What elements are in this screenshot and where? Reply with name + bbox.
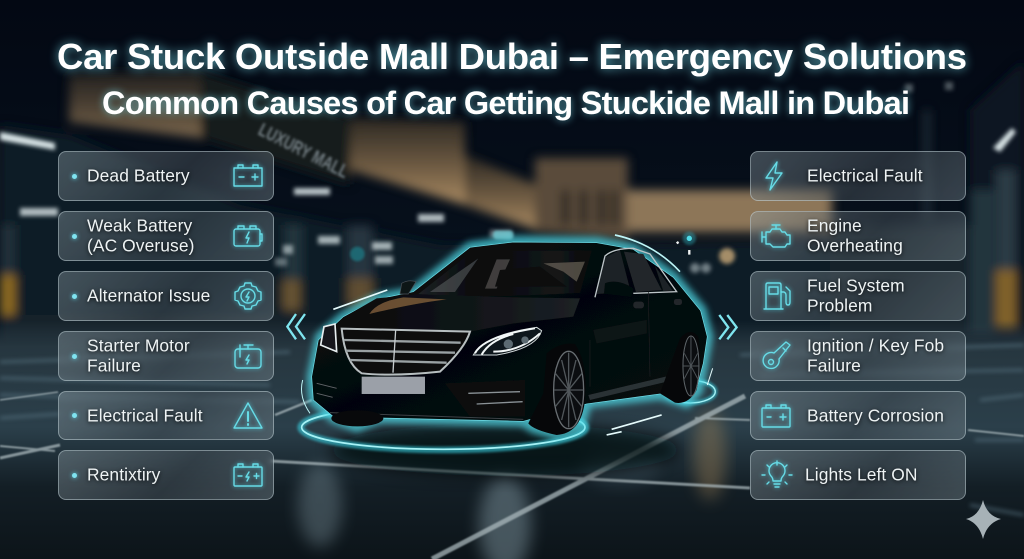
card: fuel system problem: Fuel System — [807, 276, 905, 296]
right chevrons — [719, 315, 737, 339]
garage and mall — [0, 60, 1024, 345]
card: weak battery: (AC Overuse) — [87, 235, 194, 255]
mirrors — [604, 282, 634, 297]
card: electrical fault: Electrical Fault — [87, 405, 203, 425]
card: dead battery — [58, 151, 274, 201]
card: starter motor failure: Failure — [87, 355, 141, 375]
car aura — [312, 241, 708, 435]
card: starter motor failure — [58, 331, 274, 381]
windshield — [418, 251, 592, 296]
card: ignition / key fob failure: Failure — [807, 355, 861, 375]
card: engine overheating: Engine — [807, 216, 862, 236]
card: lights left on — [750, 450, 966, 500]
mall sign: LUXURY MALL — [255, 120, 352, 182]
card: alternator issue — [58, 271, 274, 321]
door handles & lines — [633, 302, 644, 308]
panel: right causes list — [750, 151, 966, 500]
side windows — [597, 250, 631, 294]
card: alternator issue: Alternator Issue — [87, 285, 210, 305]
headlights — [473, 327, 542, 355]
glow ring under car — [301, 380, 715, 450]
main title: Car Stuck Outside Mall Dubai – Emergency Solutions — [57, 36, 967, 77]
panel: left causes list — [58, 151, 274, 500]
card: electrical fault — [58, 391, 274, 440]
card: weak battery: Weak Battery — [87, 216, 192, 236]
subtitle: Common Causes of Car Getting Stuckide Mall in Dubai — [102, 85, 910, 121]
hero car with neon glow — [287, 231, 737, 450]
card: dead battery: Dead Battery — [87, 165, 190, 185]
card: battery corrosion — [750, 391, 966, 440]
card: battery corrosion: Battery Corrosion — [807, 405, 944, 425]
card: starter motor failure: Starter Motor — [87, 336, 190, 356]
card: weak battery — [58, 211, 274, 261]
card: ignition / key fob failure — [750, 331, 966, 381]
card: lights left on: Lights Left ON — [805, 464, 918, 484]
front grille — [342, 329, 470, 375]
watermark sparkle — [966, 500, 1001, 539]
card: fuel system problem: Problem — [807, 295, 872, 315]
card: rentixtiry — [58, 450, 274, 500]
car body — [312, 242, 707, 421]
front and rear wheels — [331, 332, 700, 435]
card: engine overheating — [750, 211, 966, 261]
bumper & plate — [362, 377, 425, 394]
card: electrical fault: Electrical Fault — [807, 165, 923, 185]
card: fuel system problem — [750, 271, 966, 321]
card: rentixtiry: Rentixtiry — [87, 464, 160, 484]
wet parking ground — [0, 320, 1024, 559]
card: electrical fault — [750, 151, 966, 201]
card: engine overheating: Overheating — [807, 235, 903, 255]
light streaks and sparkles — [301, 231, 713, 435]
card: ignition / key fob failure: Ignition / Key Fob — [807, 336, 944, 356]
left chevrons — [287, 314, 305, 339]
hood shine — [343, 294, 580, 332]
